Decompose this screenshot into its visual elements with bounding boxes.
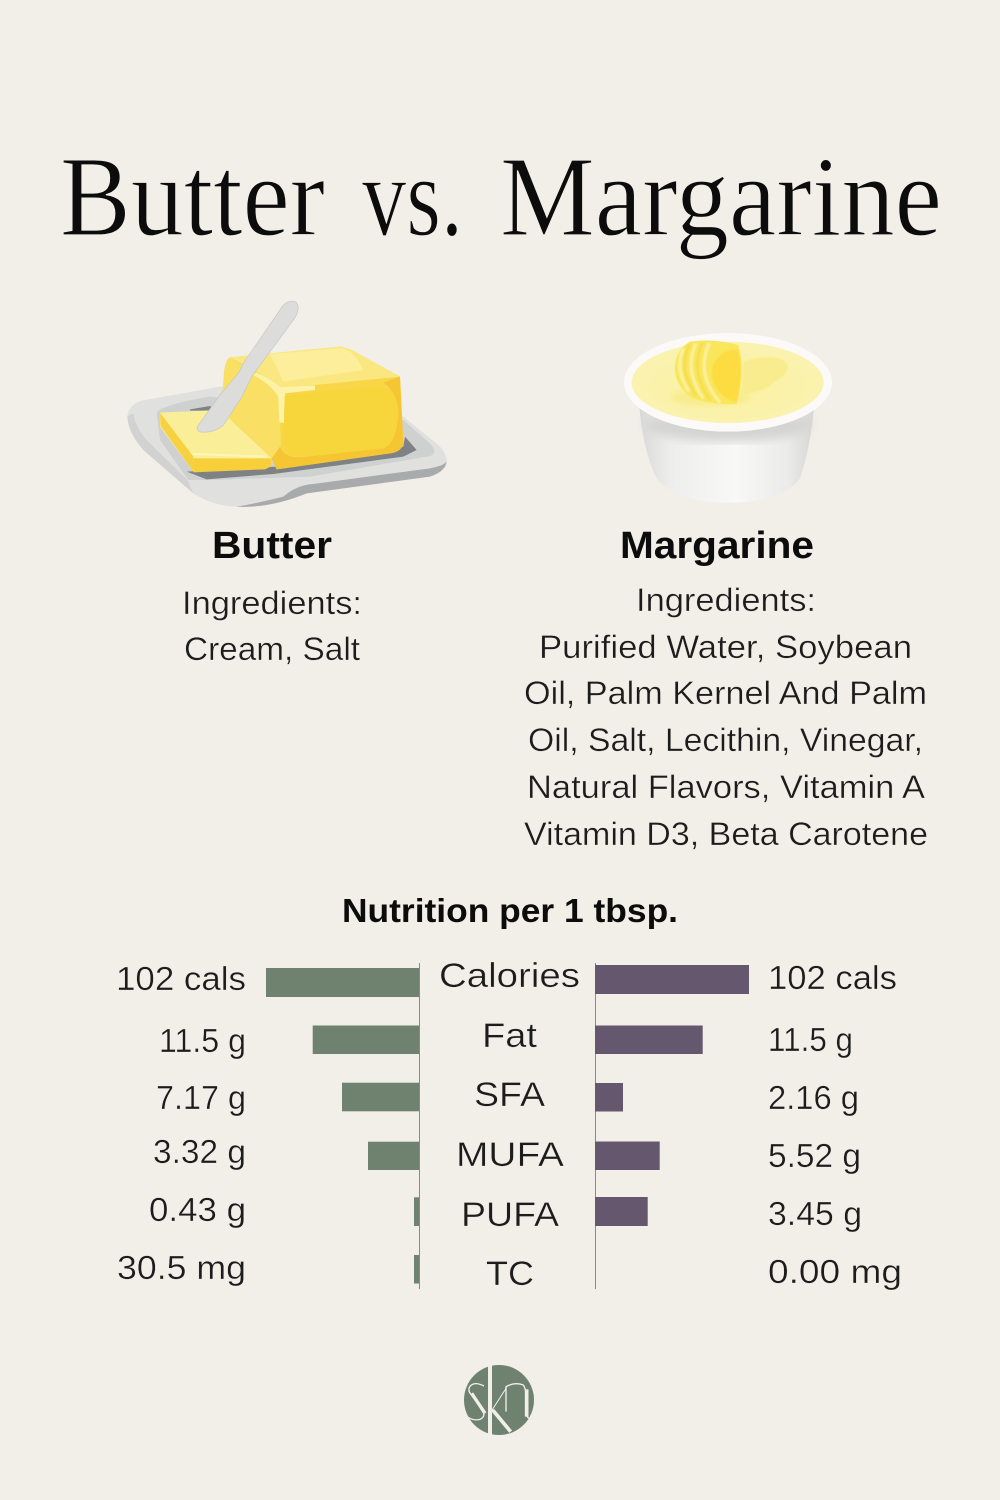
metric labels: Calories [439,957,580,995]
butter bar chart [266,968,420,1284]
tub rim [624,333,832,432]
nutrition heading: Nutrition per 1 tbsp. [342,892,678,929]
title: Butter [60,133,325,260]
margarine ingredients [524,582,928,852]
dish [127,387,447,507]
metric labels: Fat [482,1017,538,1055]
butter values [116,960,246,1286]
title [60,133,942,260]
metric labels: SFA [474,1076,545,1114]
margarine values: 3.45 g [768,1195,862,1232]
metric labels [439,957,580,1293]
margarine values: 0.00 mg [768,1253,902,1290]
margarine values: 2.16 g [768,1079,859,1116]
margarine ingredients: Oil, Palm Kernel And Palm [524,675,927,711]
metric labels: TC [486,1255,534,1293]
margarine values: 11.5 g [768,1021,853,1058]
butter heading: Butter [212,525,332,567]
margarine values: 5.52 g [768,1137,861,1174]
left axis [419,963,420,1289]
margarine ingredients: Ingredients: [636,582,816,618]
right axis [595,963,596,1289]
butter block [220,347,403,469]
butter values: 102 cals [116,960,246,997]
butter ingredients [182,585,362,667]
margarine bar chart [595,965,749,1226]
margarine values: 102 cals [768,959,897,996]
butter curl [675,341,741,404]
margarine ingredients: Vitamin D3, Beta Carotene [524,816,928,852]
margarine ingredients: Oil, Salt, Lecithin, Vinegar, [528,722,923,758]
butter values: 30.5 mg [117,1249,246,1286]
dent shadow [742,357,788,393]
margarine values [768,959,902,1290]
butter values: 3.32 g [153,1133,246,1170]
tub rim shadow [645,408,811,442]
metric labels: PUFA [461,1196,559,1234]
icon: butter on dish [127,301,447,507]
butter slice [160,410,272,472]
butter values: 0.43 g [149,1191,246,1228]
knife [197,301,298,432]
margarine heading: Margarine [620,525,814,567]
margarine surface [632,342,824,423]
butter ingredients: Cream, Salt [184,631,360,667]
margarine ingredients: Natural Flavors, Vitamin A [527,769,926,805]
title: Margarine [500,133,942,260]
logo [464,1364,534,1435]
icon: margarine tub [624,333,832,503]
butter values: 7.17 g [156,1079,246,1116]
metric labels: MUFA [456,1136,564,1174]
butter ingredients: Ingredients: [182,585,362,621]
title: vs. [362,133,463,260]
margarine ingredients: Purified Water, Soybean [539,629,912,665]
tub body [639,407,814,503]
butter values: 11.5 g [159,1022,246,1059]
